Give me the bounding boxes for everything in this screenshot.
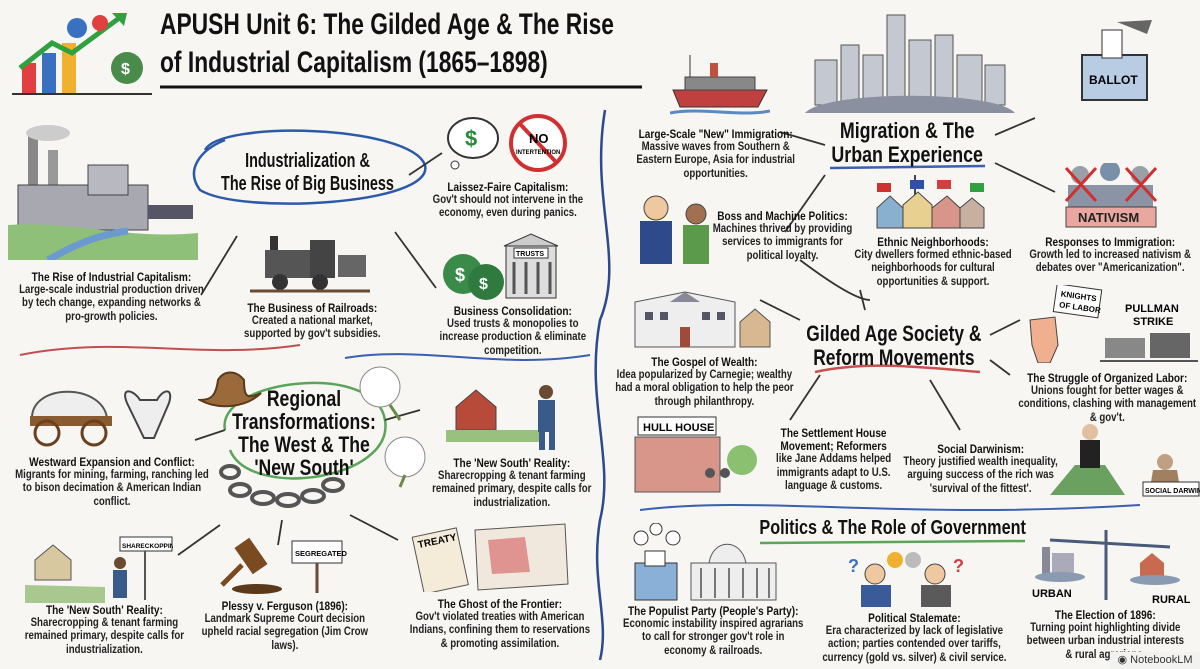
text: Boss and Machine Politics: Boss and Machine Politics: (717, 209, 848, 223)
text: New South Reality (left): The 'New South' Reality: (46, 603, 163, 617)
icon: Hull House (630, 415, 760, 493)
text: Business of Railroads: Created a national market, supported by gov't subsidies. (244, 315, 381, 340)
icon: thought bubble dollar and no intervention: INTERTENTION (516, 150, 560, 156)
icon: nativism crowd (1065, 163, 1157, 228)
text: New South Reality (right): Sharecropping & tenant farming remained primary, despite calls for industrialization. (432, 470, 591, 509)
text: Westward Expansion: Migrants for mining, farming, ranching led to bison decimation & American Indian conflict. (15, 469, 209, 508)
icon: wagon and skull (30, 390, 172, 446)
title: of Industrial Capitalism (1865–1898) (160, 46, 548, 79)
icon: arguing politicians: ? (848, 556, 859, 576)
text: Ethnic Neighborhoods: City dwellers formed ethnic-based neighborhoods for cultural opportunities & support. (854, 249, 1012, 288)
heading: Migration & Urban Experience (831, 118, 983, 167)
icon: ballot box and capitol (631, 523, 781, 601)
icon: Knights of Labor fist: OF LABOR (1059, 300, 1101, 315)
icon: Pullman strike train (1100, 303, 1198, 362)
badge: NotebookLM: ◉ NotebookLM (1117, 654, 1193, 666)
text: Populist Party: The Populist Party (People's Party): (628, 604, 798, 618)
text: Gospel of Wealth: Idea popularized by Carnegie; wealthy had a moral obligation to help the peor through philanthropy. (615, 369, 793, 408)
icon: rich man on money, Social Darwinism label (1045, 420, 1200, 500)
text: New South Reality (left): Sharecropping & tenant farming remained primary, despite calls for industrialization. (25, 617, 184, 656)
heading: Industrialization: Industrialization & (245, 150, 370, 172)
text: Boss and Machine Politics: Machines thrived by providing services to immigrants for political loyalty. (713, 223, 852, 262)
text: Ghost of the Frontier: Gov't violated treaties with American Indians, confining them to reservations & promoting assimilation. (410, 611, 590, 650)
text: Election of 1896: Turning point highlighting divide between urban industrial interests & rural agrarians. (1027, 622, 1184, 661)
icon: money bags and trusts: $ (479, 276, 488, 293)
heading: Gilded Age Society: Gilded Age Society & (806, 321, 981, 346)
text: Struggle of Organized Labor: The Struggle of Organized Labor: (1027, 371, 1187, 385)
text: Laissez-Faire: Laissez-Faire Capitalism: (447, 180, 568, 194)
icon: handshake politicians (640, 196, 709, 264)
icon: thought bubble dollar and no intervention (447, 114, 567, 172)
badge: NotebookLM (1110, 652, 1200, 669)
icon: thought bubble dollar and no intervention: $ (465, 126, 477, 151)
heading: Migration & Urban Experience: Urban Experience (831, 142, 983, 167)
icon: Knights of Labor fist (1030, 285, 1102, 363)
icon: arguing politicians (843, 552, 970, 607)
title: APUSH Unit 6: The Gilded Age & The Rise (160, 8, 614, 41)
heading: Gilded Age Society (806, 321, 981, 370)
icon: scale urban vs rural (1030, 525, 1190, 605)
text: Political Stalemate: Political Stalemate: (868, 611, 961, 625)
text: Settlement House: like Jane Addams helped immigrants adapt to U.S. language & customs. (776, 453, 891, 492)
icon: city skyline (805, 14, 1015, 113)
text: Business of Railroads: The Business of Railroads: (247, 301, 377, 315)
text: New South Reality (right): The 'New South' Reality: (453, 456, 570, 470)
icon: chain (219, 464, 345, 508)
icon: treaty and map: TREATY (417, 532, 458, 551)
icon: ship (670, 55, 770, 114)
text: Large-Scale Immigration: Large-Scale "New" Immigration: (639, 127, 793, 141)
text: Struggle of Organized Labor (1014, 372, 1200, 425)
icon: sharecropping sign (25, 536, 173, 603)
text: Plessy v. Ferguson: Plessy v. Ferguson (1896): (222, 599, 348, 613)
heading: Politics: Politics & The Role of Government (759, 517, 1026, 539)
icon: growth chart with gears: $ (121, 61, 130, 78)
icon: scale urban vs rural: URBAN (1032, 588, 1072, 600)
text: Rise of Industrial Capitalism: Large-scale industrial production driven by tech change, expanding networks & pro-growth policies. (19, 284, 204, 323)
icon: thought bubble dollar and no intervention: NO (529, 131, 548, 146)
icon: Pullman strike train: PULLMAN (1125, 303, 1179, 315)
text: Social Darwinism: Social Darwinism: (937, 442, 1024, 456)
icon: barn and farmer (446, 385, 555, 450)
text: Settlement House (758, 427, 909, 493)
icon: arguing politicians: ? (953, 556, 964, 576)
text: Social Darwinism: Theory justified wealth inequality, arguing success of the rich was 'survival of the fittest'. (903, 456, 1058, 495)
text: Political Stalemate: Era characterized by lack of legislative action; parties contended over tariffs, currency (gold vs. silver) & civil service. (822, 625, 1006, 664)
text: Responses to Immigration: Growth led to increased nativism & debates over "Americanization". (1029, 249, 1191, 274)
heading: Regional Transformations: Regional Transformations: The West & The 'New South' (232, 386, 376, 480)
icon: cotton (360, 366, 426, 488)
text: Election of 1896 (1023, 609, 1188, 662)
icon: train (250, 236, 370, 292)
icon: ethnic neighborhood houses (876, 180, 984, 228)
icon: gavel and segregated sign: SEGREGATED (295, 549, 347, 558)
icon: mansion (634, 292, 770, 348)
text: Westward Expansion: Westward Expansion and Conflict: (29, 455, 195, 469)
icon: growth chart with gears (12, 13, 152, 95)
text: Election of 1896: The Election of 1896: (1055, 608, 1156, 622)
text: Gospel of Wealth: The Gospel of Wealth: (651, 355, 758, 369)
text: Plessy v. Ferguson: Landmark Supreme Court decision upheld racial segregation (Jim Crow laws). (202, 613, 368, 652)
text: Responses to Immigration: Responses to Immigration: (1045, 235, 1175, 249)
text: Ghost of the Frontier: The Ghost of the Frontier: (438, 597, 562, 611)
text: Business Consolidation: Business Consolidation: (454, 304, 572, 318)
icon: Pullman strike train: STRIKE (1133, 316, 1173, 328)
text: Responses to Immigration (1029, 235, 1191, 274)
icon: Knights of Labor fist: KNIGHTS (1060, 289, 1098, 303)
icon: cowboy hat (198, 372, 262, 408)
icon: gavel and segregated sign (220, 538, 347, 594)
icon: money bags and trusts: $ (455, 265, 465, 285)
text: Business of Railroads (244, 301, 381, 340)
heading: Migration & Urban Experience: Migration & The (840, 118, 975, 143)
text: Struggle of Organized Labor: Unions fought for better wages & conditions, clashing with management & gov't. (1018, 385, 1196, 424)
text: Populist Party: Economic instability inspired agrarians to call for stronger gov't role in economy & railroads. (623, 618, 803, 657)
heading: Industrialization (221, 150, 394, 195)
icon: ballot box (1081, 20, 1152, 101)
icon: Hull House: HULL HOUSE (643, 422, 714, 434)
text: Rise of Industrial Capitalism: The Rise of Industrial Capitalism: (32, 270, 191, 284)
icon: money bags and trusts (443, 234, 558, 300)
title (160, 8, 614, 79)
icon: ballot box: BALLOT (1089, 73, 1138, 87)
text: Settlement House: The Settlement House Movement; Reformers (780, 426, 887, 453)
icon: money bags and trusts: TRUSTS (516, 251, 544, 258)
text: Large-Scale Immigration: Massive waves from Southern & Eastern Europe, Asia for industrial opportunities. (636, 141, 795, 180)
icon: factory (8, 125, 198, 260)
text: Laissez-Faire (433, 180, 583, 219)
icon: nativism crowd: NATIVISM (1078, 210, 1139, 225)
icon: treaty and map (412, 524, 568, 592)
text: Business Consolidation: Used trusts & monopolies to increase production & eliminate competition. (440, 318, 586, 357)
heading: Gilded Age Society: Reform Movements (813, 345, 975, 370)
heading: Industrialization: The Rise of Big Business (221, 173, 394, 195)
text: Ethnic Neighborhoods: Ethnic Neighborhoods: (877, 235, 989, 249)
text: Social Darwinism (900, 443, 1061, 496)
text: Laissez-Faire: Gov't should not intervene in the economy, even during panics. (433, 194, 583, 219)
